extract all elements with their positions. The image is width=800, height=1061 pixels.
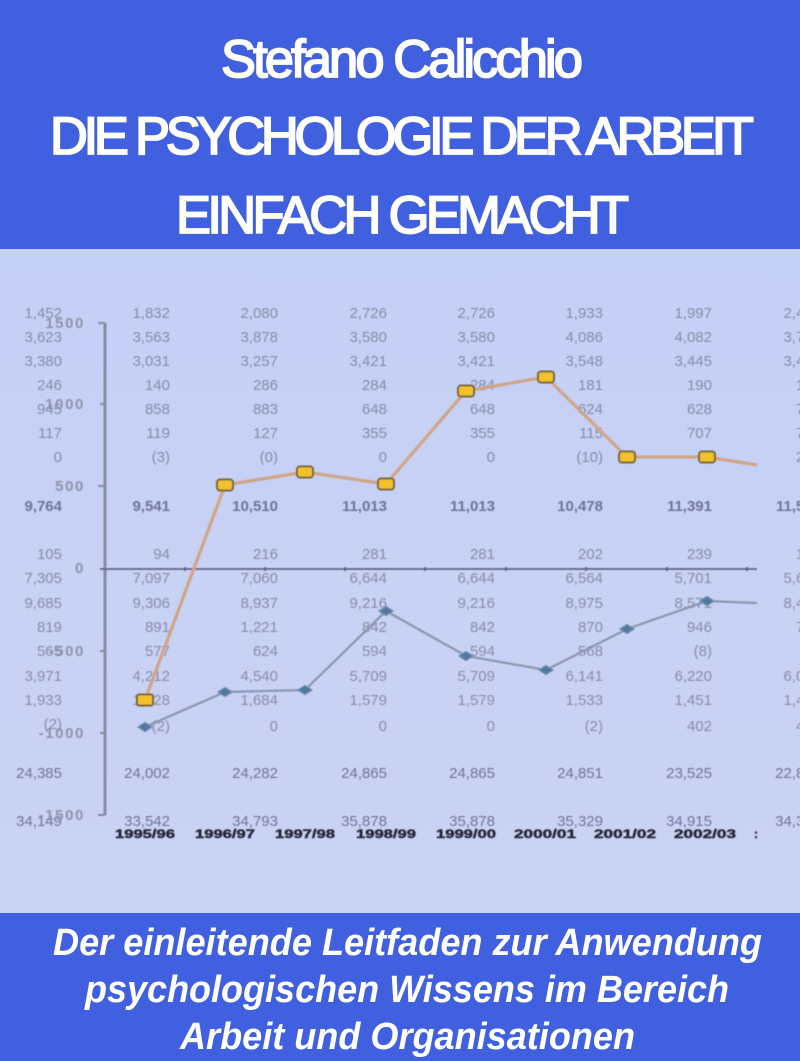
y axis labels: 500 bbox=[55, 478, 85, 495]
x axis year labels: 1998/99 bbox=[356, 827, 416, 841]
table column 1: 3,623 bbox=[24, 329, 62, 346]
table column 3: 624 bbox=[253, 643, 278, 660]
x axis year labels: 1997/98 bbox=[275, 827, 335, 841]
table column 6: (10) bbox=[576, 449, 603, 466]
table column 6 bbox=[557, 305, 603, 830]
table column 7: 190 bbox=[687, 377, 712, 394]
table column 2: 24,002 bbox=[124, 765, 170, 782]
book title line 2: EINFACH GEMACHT bbox=[176, 186, 629, 245]
table column 3: 2,080 bbox=[240, 305, 278, 322]
table column 4: 594 bbox=[362, 643, 387, 660]
table column 7: 402 bbox=[687, 718, 712, 735]
table column 3: 1,684 bbox=[240, 692, 278, 709]
table column 3: 8,937 bbox=[240, 595, 278, 612]
table column 6: 24,851 bbox=[557, 765, 603, 782]
table column 4: 2,726 bbox=[349, 305, 387, 322]
table column 1: 1,933 bbox=[24, 692, 62, 709]
table column 3: 883 bbox=[253, 401, 278, 418]
table column 4: 3,580 bbox=[349, 329, 387, 346]
x axis year labels: 2001/02 bbox=[594, 827, 656, 841]
table column 1: 819 bbox=[37, 619, 62, 636]
y axis labels: 1500 bbox=[45, 315, 85, 332]
table column 7: 1,997 bbox=[674, 305, 712, 322]
panel: top title band bbox=[0, 0, 800, 249]
table column 6: 202 bbox=[578, 546, 603, 563]
subtitle line 2: psychologischen Wissens im Bereich bbox=[84, 969, 729, 1011]
table column 5: 6,644 bbox=[457, 570, 495, 587]
table column 3: 216 bbox=[253, 546, 278, 563]
table column 1: 0 bbox=[54, 449, 62, 466]
table column 5: 5,709 bbox=[457, 668, 495, 685]
x axis year labels bbox=[115, 827, 758, 841]
table column 5: 3,580 bbox=[457, 329, 495, 346]
table column 2: 3,031 bbox=[132, 353, 170, 370]
table column 6: 35,329 bbox=[557, 813, 603, 830]
table column 1: 3,971 bbox=[24, 668, 62, 685]
table column 1: 3,380 bbox=[24, 353, 62, 370]
table column 7: 5,701 bbox=[674, 570, 712, 587]
table column 5: 594 bbox=[470, 643, 495, 660]
table column 7: 1,451 bbox=[674, 692, 712, 709]
table column 4: 11,013 bbox=[342, 498, 387, 515]
table column 3: (0) bbox=[260, 449, 278, 466]
table column 5: 3,421 bbox=[457, 353, 495, 370]
table column 7: 3,445 bbox=[674, 353, 712, 370]
table column 2: 7,097 bbox=[132, 570, 170, 587]
table column 4: 3,421 bbox=[349, 353, 387, 370]
table column 5: 842 bbox=[470, 619, 495, 636]
table column 4: 281 bbox=[362, 546, 387, 563]
y axis labels: -1000 bbox=[39, 725, 85, 742]
table column 2: 891 bbox=[145, 619, 170, 636]
table column 7: 11,391 bbox=[667, 498, 712, 515]
table column 5: 0 bbox=[487, 718, 495, 735]
table column 2: 33,542 bbox=[124, 813, 170, 830]
table column 3: 286 bbox=[253, 377, 278, 394]
table column 2: 94 bbox=[153, 546, 170, 563]
blue series line bbox=[145, 601, 757, 727]
table column 4: 24,865 bbox=[341, 765, 387, 782]
data table behind chart bbox=[16, 305, 800, 830]
table column 1: 9,764 bbox=[24, 498, 63, 515]
author name: Stefano Calicchio bbox=[221, 30, 583, 89]
y axis labels: 0 bbox=[75, 560, 85, 577]
table column 7: 3 bbox=[704, 449, 712, 466]
table column 4: 284 bbox=[362, 377, 387, 394]
table column 7: 628 bbox=[687, 401, 712, 418]
table column 2: 4,212 bbox=[132, 668, 170, 685]
table column 4: 648 bbox=[362, 401, 387, 418]
subtitle line 1: Der einleitende Leitfaden zur Anwendung bbox=[53, 922, 762, 964]
x axis year labels: 1999/00 bbox=[436, 827, 496, 841]
table column 3: 3,878 bbox=[240, 329, 278, 346]
table column 1 bbox=[16, 305, 63, 830]
panel: chart background bbox=[0, 249, 800, 913]
x axis bbox=[100, 567, 757, 571]
table column 4: 0 bbox=[379, 449, 387, 466]
subtitle line 3: Arbeit und Organisationen bbox=[179, 1016, 635, 1058]
x axis year labels: 2002/03 bbox=[674, 827, 736, 841]
table column 3: 0 bbox=[270, 718, 278, 735]
panel: bottom subtitle band bbox=[0, 913, 800, 1061]
table column 3: 34,793 bbox=[232, 813, 278, 830]
subtitle bbox=[53, 922, 762, 1058]
table column 7: 707 bbox=[687, 425, 712, 442]
table column 3: 24,282 bbox=[232, 765, 278, 782]
table column 2 bbox=[124, 305, 170, 830]
title bbox=[50, 30, 754, 245]
table column 6: 1,933 bbox=[565, 305, 603, 322]
x axis year labels: 2000/01 bbox=[514, 827, 576, 841]
table column 2: 1,832 bbox=[132, 305, 170, 322]
table column 6: 568 bbox=[578, 643, 603, 660]
table column 7: 8,571 bbox=[674, 595, 712, 612]
table column 1: 565 bbox=[37, 643, 62, 660]
table column 2: 9,306 bbox=[132, 595, 170, 612]
table column 3 bbox=[232, 305, 278, 830]
table column 3: 4,540 bbox=[240, 668, 278, 685]
table column 5 bbox=[449, 305, 495, 830]
table column 7: 34,915 bbox=[666, 813, 712, 830]
table column 3: 3,257 bbox=[240, 353, 278, 370]
table column 4: 355 bbox=[362, 425, 387, 442]
table column 6: 8,975 bbox=[565, 595, 603, 612]
blue series markers bbox=[138, 596, 714, 732]
table column 1: 1,452 bbox=[24, 305, 62, 322]
table column 2: (3) bbox=[152, 449, 170, 466]
table column 1: 945 bbox=[37, 401, 62, 418]
table column 5: 284 bbox=[470, 377, 495, 394]
y axis labels: 1000 bbox=[45, 396, 85, 413]
table column 1: 117 bbox=[38, 425, 62, 442]
table column 5: 24,865 bbox=[449, 765, 495, 782]
table column 3: 1,221 bbox=[240, 619, 278, 636]
table column 3: 127 bbox=[253, 425, 278, 442]
table column 3: 7,060 bbox=[240, 570, 278, 587]
table column 1: 7,305 bbox=[24, 570, 62, 587]
table column 5: 11,013 bbox=[450, 498, 495, 515]
table column 4: 5,709 bbox=[349, 668, 387, 685]
table column 5: 1,579 bbox=[457, 692, 495, 709]
table column 6: 1,533 bbox=[565, 692, 603, 709]
table column 5: 0 bbox=[487, 449, 495, 466]
table column 2: 858 bbox=[145, 401, 170, 418]
table column 5: 2,726 bbox=[457, 305, 495, 322]
table column 6: 870 bbox=[578, 619, 603, 636]
table column 6: 10,478 bbox=[557, 498, 603, 515]
table column 6: 6,564 bbox=[565, 570, 603, 587]
y axis labels: -500 bbox=[49, 643, 85, 660]
table column 3: 10,510 bbox=[232, 498, 278, 515]
table column 5: 648 bbox=[470, 401, 495, 418]
y axis labels: -1500 bbox=[39, 807, 85, 824]
table column 1: 105 bbox=[37, 546, 62, 563]
table column 2: 577 bbox=[145, 643, 170, 660]
table column 2: 140 bbox=[145, 377, 170, 394]
table column 5: 9,216 bbox=[457, 595, 495, 612]
table column 6: 3,548 bbox=[565, 353, 603, 370]
book title line 1: DIE PSYCHOLOGIE DER ARBEIT bbox=[50, 107, 754, 166]
table column 4: 1,579 bbox=[349, 692, 387, 709]
y axis labels bbox=[39, 315, 85, 824]
table column 2: 3,563 bbox=[132, 329, 170, 346]
table column 1: 34,149 bbox=[16, 813, 62, 830]
table column 6: 624 bbox=[578, 401, 603, 418]
table column 6: (2) bbox=[585, 718, 603, 735]
table column 4: 842 bbox=[362, 619, 387, 636]
table column 5: 355 bbox=[470, 425, 495, 442]
orange series line bbox=[145, 377, 757, 700]
table column 2: 9,541 bbox=[132, 498, 170, 515]
table column 5: 281 bbox=[470, 546, 495, 563]
table column 6: 181 bbox=[578, 377, 603, 394]
table column 2: 119 bbox=[146, 425, 170, 442]
table column 7: 23,525 bbox=[666, 765, 712, 782]
table column 7: 946 bbox=[687, 619, 712, 636]
y axis bbox=[98, 323, 105, 815]
table column 7: 4,082 bbox=[674, 329, 712, 346]
x axis year labels: 1996/97 bbox=[195, 827, 255, 841]
table column 1: (2) bbox=[44, 716, 62, 733]
table column 1: 9,685 bbox=[24, 595, 62, 612]
table column 1: 246 bbox=[37, 377, 62, 394]
table column 8 clipped at right edge bbox=[775, 305, 800, 830]
table column 7: (8) bbox=[694, 643, 712, 660]
table column 6: 4,086 bbox=[565, 329, 603, 346]
table column 2: 1,828 bbox=[132, 692, 170, 709]
orange series markers bbox=[137, 372, 715, 706]
table column 5: 35,878 bbox=[449, 813, 495, 830]
table column 6: 115 bbox=[579, 425, 603, 442]
table column 2: (2) bbox=[152, 718, 170, 735]
table column 6: 6,141 bbox=[565, 668, 603, 685]
table column 7: 6,220 bbox=[674, 668, 712, 685]
table column 7: 239 bbox=[687, 546, 712, 563]
x axis year labels: : bbox=[754, 827, 758, 841]
table column 1: 24,385 bbox=[16, 765, 62, 782]
table column 4: 35,878 bbox=[341, 813, 387, 830]
table column 4: 0 bbox=[379, 718, 387, 735]
table column 4: 9,216 bbox=[349, 595, 387, 612]
table column 4 bbox=[341, 305, 387, 830]
table column 4: 6,644 bbox=[349, 570, 387, 587]
table column 7 bbox=[666, 305, 712, 830]
line chart bbox=[39, 315, 758, 841]
x axis year labels: 1995/96 bbox=[115, 827, 175, 841]
